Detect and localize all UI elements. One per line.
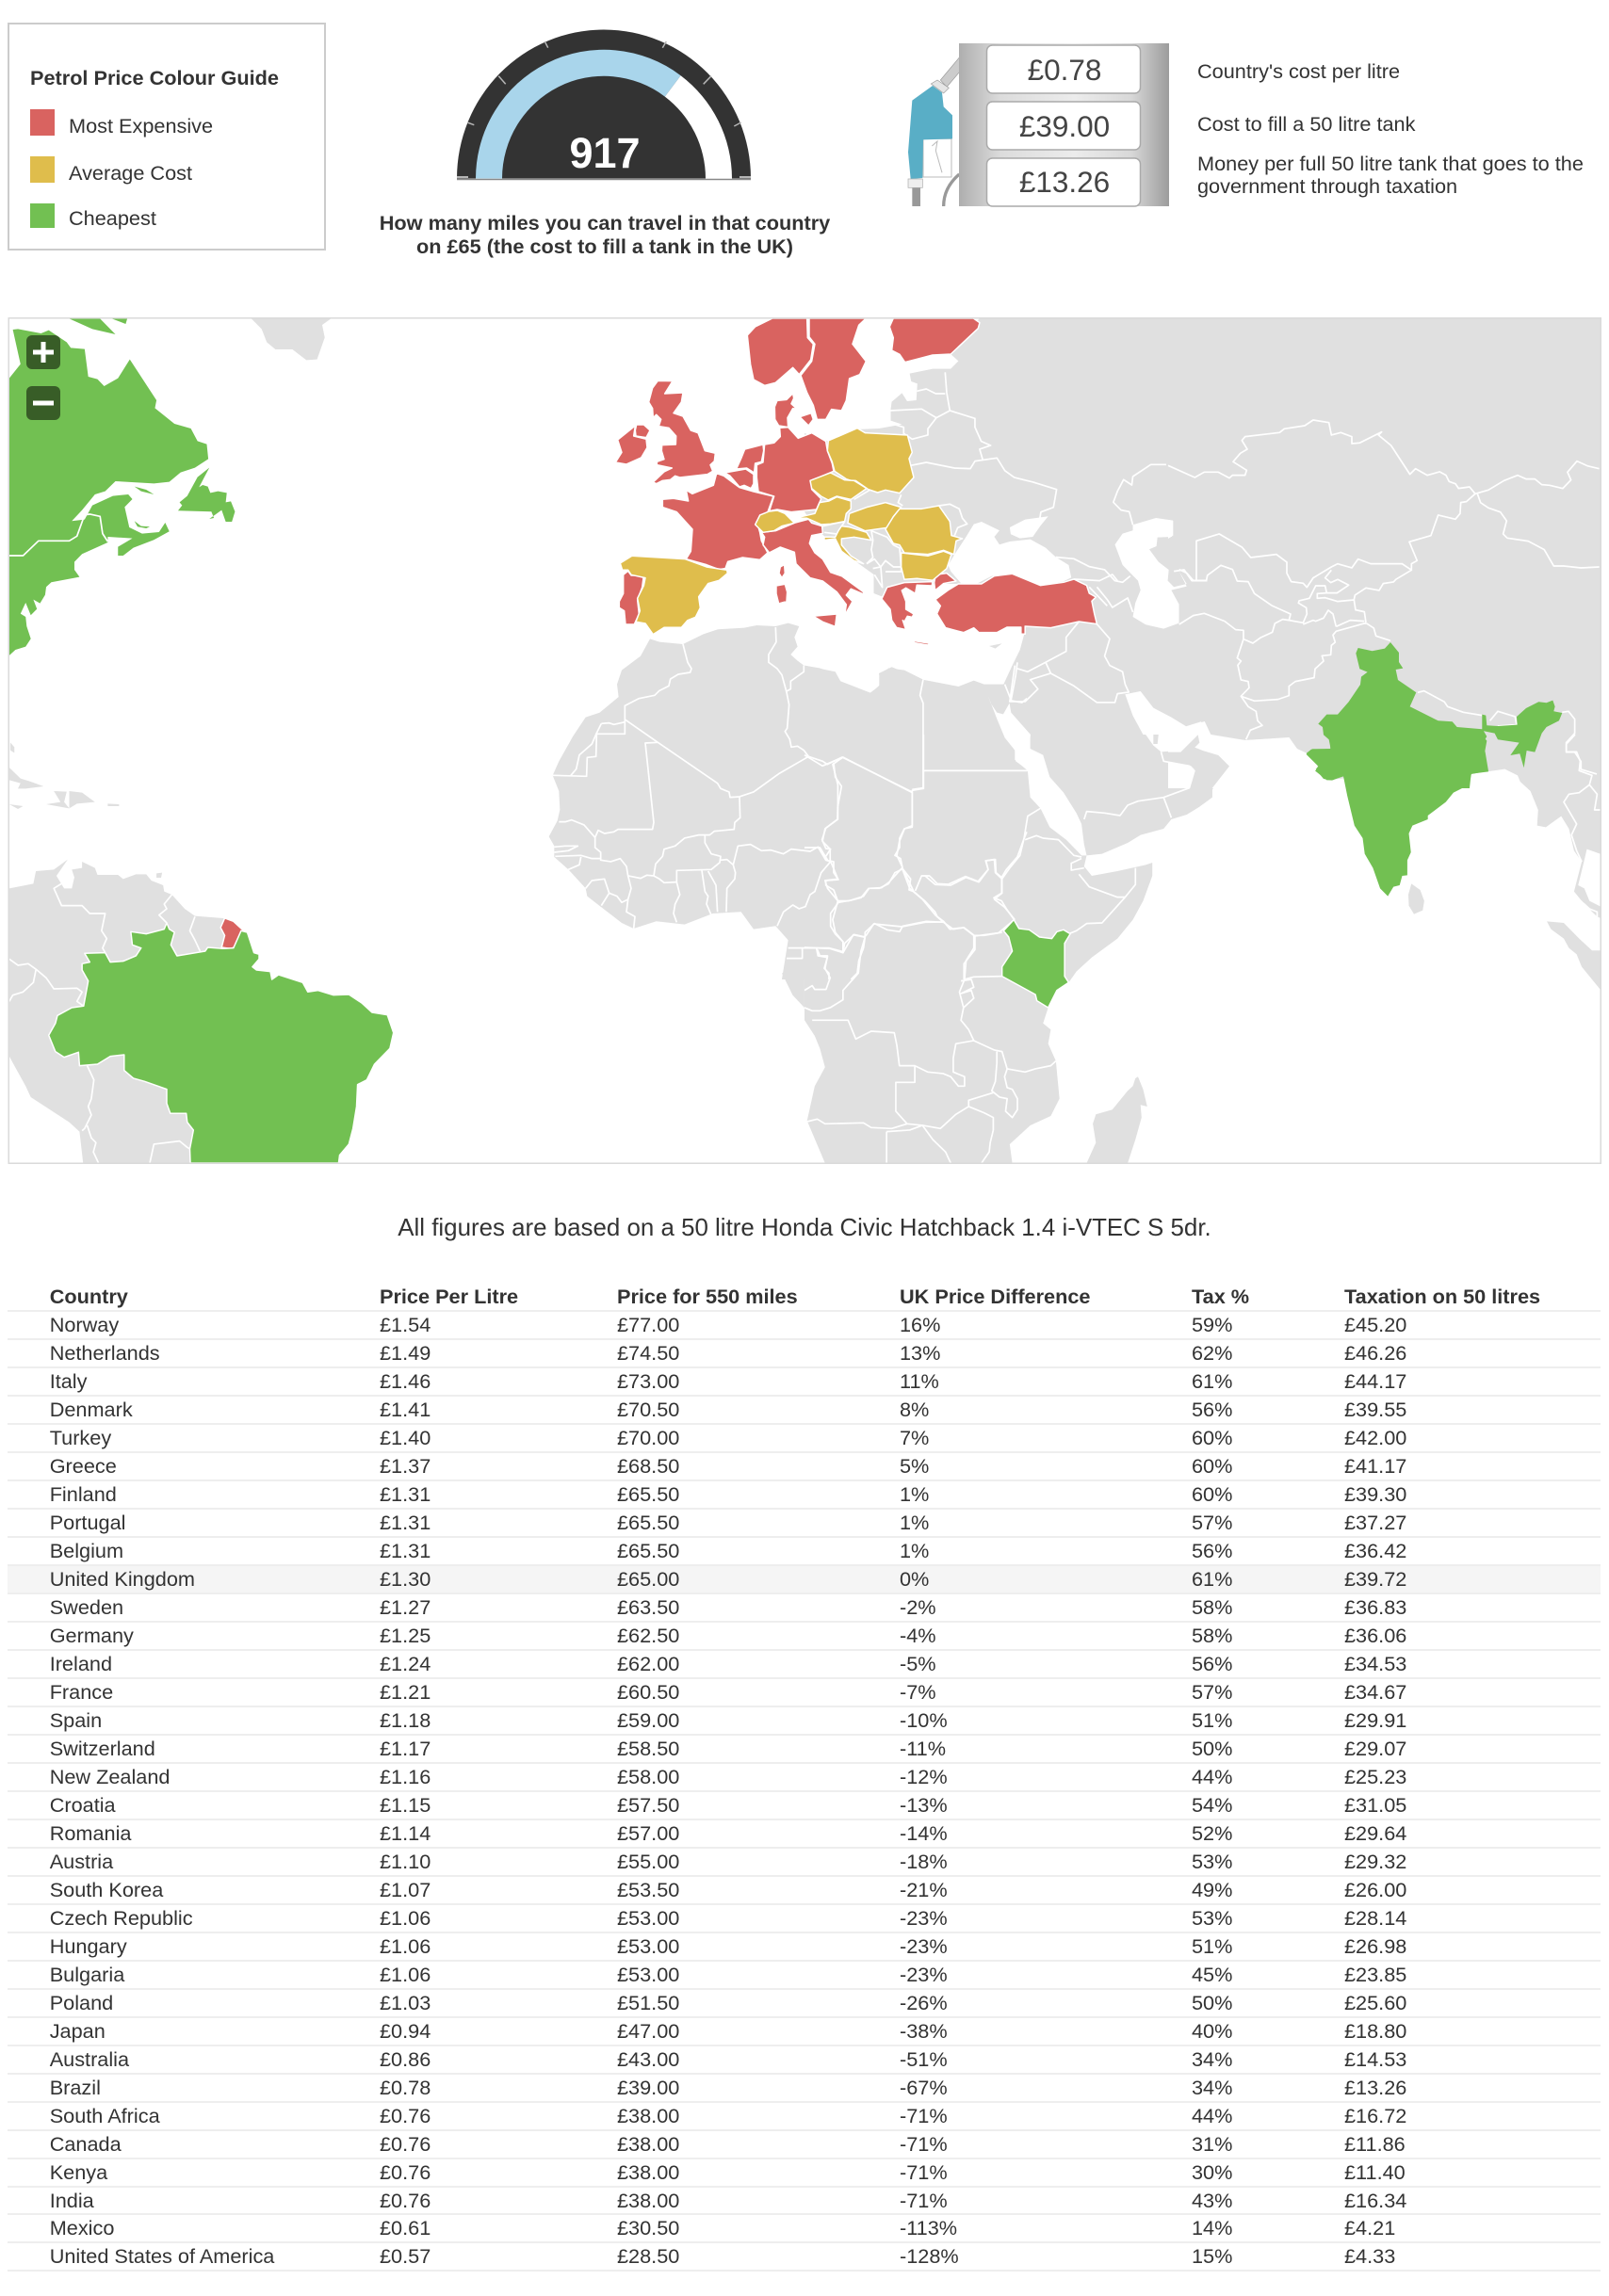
table: petrol prices by country: 34% (1192, 2047, 1232, 2071)
table: petrol prices by country: Kenya (50, 2160, 107, 2184)
table: petrol prices by country: Poland (50, 1991, 113, 2014)
country: Hungary (848, 503, 902, 531)
table header row: Taxation on 50 litres (1344, 1285, 1540, 1308)
table: petrol prices by country: -128% (900, 2244, 959, 2268)
table: petrol prices by country: £60.50 (617, 1680, 679, 1704)
table: petrol prices by country: -38% (900, 2019, 948, 2043)
land: islands and peninsulas over seas (989, 643, 1605, 1163)
table: petrol prices by country: South Africa (50, 2104, 160, 2127)
table: petrol prices by country: 13% (900, 1341, 940, 1365)
country: Spain (620, 556, 727, 635)
table: petrol prices by country: £37.27 (1344, 1511, 1406, 1534)
table: petrol prices by country: £11.86 (1344, 2132, 1406, 2156)
table: petrol prices by country: Brazil (50, 2076, 101, 2099)
table: petrol prices by country: -2% (900, 1595, 936, 1619)
table: petrol prices by country: £26.98 (1344, 1934, 1406, 1958)
table: petrol prices by country: £1.06 (380, 1963, 431, 1986)
table: petrol prices by country: £36.83 (1344, 1595, 1406, 1619)
table: petrol prices by country: United States of America (50, 2244, 274, 2268)
table: petrol prices by country: £1.03 (380, 1991, 431, 2014)
table: petrol prices by country: £0.76 (380, 2160, 431, 2184)
country: United Kingdom (635, 380, 715, 484)
country: Germany (756, 428, 834, 512)
land: base grey countries (9, 317, 1605, 1163)
zoom out button (26, 386, 60, 420)
country: Netherlands (738, 445, 763, 472)
table: petrol prices by country: France (50, 1680, 113, 1704)
country: Italy (761, 519, 864, 626)
table: petrol prices by country: Turkey (50, 1426, 111, 1449)
legend swatch: most expensive (30, 109, 55, 136)
country: Austria (787, 497, 851, 525)
table: petrol prices by country: Austria (50, 1850, 113, 1873)
table: petrol prices by country: -23% (900, 1963, 948, 1986)
table: petrol prices by country: 40% (1192, 2019, 1232, 2043)
table: petrol prices by country: £1.10 (380, 1850, 431, 1873)
table: petrol prices by country: £29.91 (1344, 1708, 1406, 1732)
table: petrol prices by country: £53.50 (617, 1878, 679, 1901)
table: petrol prices by country: £0.76 (380, 2104, 431, 2127)
table: petrol prices by country: 62% (1192, 1341, 1232, 1365)
table: petrol prices by country: £29.64 (1344, 1821, 1406, 1845)
table: petrol prices by country: Sweden (50, 1595, 123, 1619)
table header row (8, 1284, 1601, 1312)
table: petrol prices by country: Czech Republic (50, 1906, 193, 1930)
country borders: Africa (553, 627, 1601, 1163)
table: petrol prices by country: £1.21 (380, 1680, 431, 1704)
pump key: cost to fill a tank: Cost to fill a 50 litre tank (1197, 111, 1415, 136)
table: petrol prices by country: South Korea (50, 1878, 163, 1901)
table: petrol prices by country: £77.00 (617, 1313, 679, 1336)
table: petrol prices by country: £51.50 (617, 1991, 679, 2014)
table: petrol prices by country: £36.42 (1344, 1539, 1406, 1562)
table: petrol prices by country: -10% (900, 1708, 948, 1732)
table: petrol prices by country: £1.06 (380, 1906, 431, 1930)
legend label: most expensive: Most Expensive (69, 113, 213, 137)
country: Sweden (801, 318, 866, 419)
countries: average cost (yellow) (620, 428, 963, 635)
table: petrol prices by country: Croatia (50, 1793, 116, 1817)
country borders: South America (9, 882, 200, 1163)
table: petrol prices by country: -26% (900, 1991, 948, 2014)
zoom in button (26, 335, 60, 369)
icon: fuel pump with price displays: £13.26 (1019, 165, 1110, 199)
table header row: Tax % (1192, 1285, 1249, 1308)
table: petrol prices by country: £43.00 (617, 2047, 679, 2071)
table: petrol prices by country: Switzerland (50, 1737, 155, 1760)
country: Poland (827, 428, 914, 493)
table: petrol prices by country: 54% (1192, 1793, 1232, 1817)
table: petrol prices by country: £46.26 (1344, 1341, 1406, 1365)
country: Belgium (726, 469, 754, 488)
table: petrol prices by country: £41.17 (1344, 1454, 1406, 1478)
table: petrol prices by country: £44.17 (1344, 1369, 1406, 1393)
table: petrol prices by country: £53.00 (617, 1963, 679, 1986)
table: petrol prices by country: -11% (900, 1737, 946, 1760)
icon: fuel pump with price displays: £0.78 (1028, 53, 1101, 87)
table: petrol prices by country: £1.41 (380, 1398, 431, 1421)
table: petrol prices by country: 60% (1192, 1482, 1232, 1506)
table: petrol prices by country: 60% (1192, 1426, 1232, 1449)
highlighted row: United Kingdom: £65.00 (617, 1567, 679, 1591)
country: Switzerland (756, 510, 794, 532)
table: petrol prices by country: £1.37 (380, 1454, 431, 1478)
table: petrol prices by country: Italy (50, 1369, 87, 1393)
table header row: UK Price Difference (900, 1285, 1091, 1308)
table: petrol prices by country: £0.86 (380, 2047, 431, 2071)
table: petrol prices by country: £57.50 (617, 1793, 679, 1817)
table: petrol prices by country: £1.15 (380, 1793, 431, 1817)
table: petrol prices by country: £73.00 (617, 1369, 679, 1393)
table: petrol prices by country: £1.49 (380, 1341, 431, 1365)
table: petrol prices by country: 58% (1192, 1624, 1232, 1647)
table: petrol prices by country: £39.30 (1344, 1482, 1406, 1506)
country: Brazil (49, 923, 394, 1163)
country: Portugal (619, 571, 643, 624)
table: petrol prices by country: -71% (900, 2189, 948, 2211)
table: petrol prices by country: -4% (900, 1624, 936, 1647)
table: petrol prices by country: £57.00 (617, 1821, 679, 1845)
table: petrol prices by country: Denmark (50, 1398, 133, 1421)
table: petrol prices by country: Mexico (50, 2216, 114, 2239)
legend swatch: average cost (30, 156, 55, 183)
table: petrol prices by country: -23% (900, 1906, 948, 1930)
table: petrol prices by country: £65.50 (617, 1511, 679, 1534)
country: France (662, 474, 785, 578)
table: petrol prices by country: £1.25 (380, 1624, 431, 1647)
highlighted row: United Kingdom: United Kingdom (50, 1567, 195, 1591)
table: petrol prices by country: £62.50 (617, 1624, 679, 1647)
island: Crete (914, 642, 929, 644)
table: petrol prices by country: 56% (1192, 1398, 1232, 1421)
table: petrol prices by country: Finland (50, 1482, 117, 1506)
table: petrol prices by country: -21% (900, 1878, 948, 1901)
table: petrol prices by country: 30% (1192, 2160, 1232, 2184)
table: petrol prices by country: Spain (50, 1708, 102, 1732)
table: petrol prices by country: £65.50 (617, 1482, 679, 1506)
table: petrol prices by country: £4.33 (1344, 2244, 1395, 2268)
table: petrol prices by country: 34% (1192, 2076, 1232, 2099)
table: petrol prices by country: Ireland (50, 1652, 112, 1675)
table: petrol prices by country: Hungary (50, 1934, 127, 1958)
table: petrol prices by country: Netherlands (50, 1341, 160, 1365)
table: petrol prices by country: £39.55 (1344, 1398, 1406, 1421)
table: petrol prices by country: £34.67 (1344, 1680, 1406, 1704)
table: petrol prices by country: £45.20 (1344, 1313, 1406, 1336)
table: petrol prices by country: 1% (900, 1482, 929, 1506)
table: petrol prices by country: -7% (900, 1680, 936, 1704)
country: Turkey (Thrace) (935, 574, 956, 590)
table: petrol prices by country: £1.31 (380, 1511, 431, 1534)
table: petrol prices by country: 44% (1192, 2104, 1232, 2127)
legend label: average cost: Average Cost (69, 160, 192, 185)
table: petrol prices by country: £1.16 (380, 1765, 431, 1788)
table: petrol prices by country: £1.46 (380, 1369, 431, 1393)
country: Norway (747, 318, 813, 385)
table: petrol prices by country: -71% (900, 2132, 948, 2156)
table: petrol prices by country: £63.50 (617, 1595, 679, 1619)
table: petrol prices by country: £1.40 (380, 1426, 431, 1449)
table: petrol prices by country: 14% (1192, 2216, 1232, 2239)
pump key: tax per tank (1197, 151, 1584, 198)
table: petrol prices by country: £30.50 (617, 2216, 679, 2239)
table: petrol prices by country: 52% (1192, 1821, 1232, 1845)
territory: French Guiana (220, 918, 244, 948)
table: petrol prices by country: 56% (1192, 1652, 1232, 1675)
pump key: tax per tank: government through taxation (1197, 173, 1457, 198)
table: petrol prices by country: £39.00 (617, 2076, 679, 2099)
table: petrol prices by country: £1.31 (380, 1482, 431, 1506)
gauge: miles travelled on £65 (457, 30, 751, 181)
table: petrol prices by country: 50% (1192, 1737, 1232, 1760)
seas and lakes (804, 516, 1605, 1163)
country: Denmark (774, 394, 813, 428)
table: petrol prices by country: £59.00 (617, 1708, 679, 1732)
table: petrol prices by country: 53% (1192, 1906, 1232, 1930)
country: India (1307, 642, 1562, 897)
table: petrol prices by country: Portugal (50, 1511, 125, 1534)
table: petrol prices by country: -13% (900, 1793, 948, 1817)
table header row: Price Per Litre (380, 1285, 518, 1308)
country: Croatia (824, 526, 871, 564)
countries: cheapest (green) (9, 318, 1562, 1163)
table: petrol prices by country: £55.00 (617, 1850, 679, 1873)
country: Bulgaria (902, 551, 951, 580)
table: petrol prices by country: £34.53 (1344, 1652, 1406, 1675)
gauge caption (380, 211, 830, 258)
legend swatch: cheapest (30, 203, 55, 228)
table: petrol prices by country: Greece (50, 1454, 117, 1478)
country: Romania (886, 506, 963, 555)
table: petrol prices by country: 57% (1192, 1680, 1232, 1704)
gauge caption: on £65 (the cost to fill a tank in the UK) (416, 234, 793, 258)
table: petrol prices by country: Germany (50, 1624, 134, 1647)
table: petrol prices by country: £53.00 (617, 1906, 679, 1930)
table: petrol prices by country: £25.23 (1344, 1765, 1406, 1788)
table header row: Country (50, 1285, 128, 1308)
table: petrol prices by country: £25.60 (1344, 1991, 1406, 2014)
legend label: cheapest: Cheapest (69, 205, 156, 230)
table: petrol prices by country: £31.05 (1344, 1793, 1406, 1817)
table: petrol prices by country: £0.76 (380, 2132, 431, 2156)
table: petrol prices by country: 51% (1192, 1708, 1232, 1732)
table: petrol prices by country: £26.00 (1344, 1878, 1406, 1901)
pump key: tax per tank: Money per full 50 litre tank that goes to the (1197, 151, 1584, 175)
table: petrol prices by country: 5% (900, 1454, 929, 1478)
table: petrol prices by country: New Zealand (50, 1765, 170, 1788)
gauge: miles travelled on £65: 917 (569, 129, 641, 177)
table: petrol prices by country: 1% (900, 1511, 929, 1534)
table: petrol prices by country: 7% (900, 1426, 929, 1449)
table: petrol prices by country: £1.17 (380, 1737, 431, 1760)
highlighted row: United Kingdom: £39.72 (1344, 1567, 1406, 1591)
country: Czech Republic (810, 473, 867, 500)
table: petrol prices by country: £68.50 (617, 1454, 679, 1478)
table: petrol prices by country: -71% (900, 2104, 948, 2127)
table: petrol prices by country: 31% (1192, 2132, 1232, 2156)
icon: fuel pump with price displays: £39.00 (1019, 109, 1110, 143)
table: petrol prices by country: 59% (1192, 1313, 1232, 1336)
table: petrol prices by country: £1.31 (380, 1539, 431, 1562)
map frame (8, 318, 1601, 1164)
table: petrol prices by country: 49% (1192, 1878, 1232, 1901)
table: petrol prices by country: £38.00 (617, 2132, 679, 2156)
legend heading: Petrol Price Colour Guide (30, 66, 279, 89)
country borders: Europe, Middle East and Asia (753, 372, 1600, 788)
table: petrol prices by country: £16.72 (1344, 2104, 1406, 2127)
table: petrol prices by country: -14% (900, 1821, 948, 1845)
table: petrol prices by country: £0.94 (380, 2019, 431, 2043)
table: petrol prices by country: -18% (900, 1850, 948, 1873)
table: petrol prices by country: £62.00 (617, 1652, 679, 1675)
country: Finland (889, 318, 980, 363)
table: petrol prices by country: £38.00 (617, 2189, 679, 2211)
table: petrol prices by country: £70.00 (617, 1426, 679, 1449)
table: petrol prices by country: £16.34 (1344, 2189, 1406, 2211)
table: petrol prices by country: Australia (50, 2047, 129, 2071)
panel: petrol price colour guide legend (8, 23, 326, 251)
table: petrol prices by country: £1.18 (380, 1708, 431, 1732)
table: petrol prices by country: £4.21 (1344, 2216, 1395, 2239)
table: petrol prices by country: 16% (900, 1313, 940, 1336)
table: petrol prices by country: £18.80 (1344, 2019, 1406, 2043)
table: petrol prices by country: Belgium (50, 1539, 123, 1562)
highlighted row: United Kingdom (8, 1566, 1601, 1594)
table: petrol prices by country: £28.14 (1344, 1906, 1406, 1930)
gauge caption: How many miles you can travel in that country (380, 211, 830, 234)
table: petrol prices by country: Canada (50, 2132, 122, 2156)
table: petrol prices by country: -51% (900, 2047, 948, 2071)
highlighted row: United Kingdom: £1.30 (380, 1567, 431, 1591)
table: petrol prices by country: £13.26 (1344, 2076, 1406, 2099)
table: petrol prices by country: £38.00 (617, 2160, 679, 2184)
country: Ireland (615, 426, 647, 464)
table: petrol prices by country: £42.00 (1344, 1426, 1406, 1449)
table: petrol prices by country: 58% (1192, 1595, 1232, 1619)
country: Greece (882, 582, 933, 630)
table: petrol prices by country: £58.00 (617, 1765, 679, 1788)
icon: fuel pump with price displays (908, 43, 1169, 207)
table: petrol prices by country: £38.00 (617, 2104, 679, 2127)
table: petrol prices by country: 60% (1192, 1454, 1232, 1478)
table: petrol prices by country: 8% (900, 1398, 929, 1421)
table: petrol prices by country: £1.06 (380, 1934, 431, 1958)
table: petrol prices by country: 57% (1192, 1511, 1232, 1534)
table: petrol prices by country: 43% (1192, 2189, 1232, 2211)
table: petrol prices by country: £36.06 (1344, 1624, 1406, 1647)
table: petrol prices by country: -5% (900, 1652, 936, 1675)
table: petrol prices by country: -71% (900, 2160, 948, 2184)
table: petrol prices by country: 53% (1192, 1850, 1232, 1873)
country: Turkey (935, 574, 1097, 634)
country: Kenya (1002, 920, 1070, 1008)
table: petrol prices by country: £28.50 (617, 2244, 679, 2268)
table header row: Price for 550 miles (617, 1285, 798, 1308)
table: petrol prices by country: 44% (1192, 1765, 1232, 1788)
table: petrol prices by country: £1.54 (380, 1313, 431, 1336)
table: petrol prices by country: India (50, 2189, 94, 2211)
highlighted row: United Kingdom: 0% (900, 1567, 929, 1591)
table: petrol prices by country: 50% (1192, 1991, 1232, 2014)
table: petrol prices by country: 61% (1192, 1369, 1232, 1393)
table: petrol prices by country: 15% (1192, 2244, 1232, 2268)
table: petrol prices by country: £23.85 (1344, 1963, 1406, 1986)
table: petrol prices by country: £0.78 (380, 2076, 431, 2099)
table: petrol prices by country: £70.50 (617, 1398, 679, 1421)
table: petrol prices by country: £0.57 (380, 2244, 431, 2268)
table: petrol prices by country: £1.24 (380, 1652, 431, 1675)
table: petrol prices by country: £0.61 (380, 2216, 431, 2239)
table: petrol prices by country: Bulgaria (50, 1963, 124, 1986)
panel: world map (8, 317, 1601, 1164)
note: basis of figures: All figures are based on a 50 litre Honda Civic Hatchback 1.4 i-VTEC S 5dr. (398, 1215, 1211, 1241)
table: petrol prices by country: 45% (1192, 1963, 1232, 1986)
table: petrol prices by country: £29.07 (1344, 1737, 1406, 1760)
table: petrol prices by country (8, 1285, 1601, 2272)
table: petrol prices by country: 11% (900, 1369, 939, 1393)
table: petrol prices by country: -12% (900, 1765, 948, 1788)
table: petrol prices by country: £74.50 (617, 1341, 679, 1365)
highlighted row: United Kingdom: 61% (1192, 1567, 1232, 1591)
table: petrol prices by country: Japan (50, 2019, 106, 2043)
table: petrol prices by country: 1% (900, 1539, 929, 1562)
table: petrol prices by country: £1.07 (380, 1878, 431, 1901)
country: Canada and United States (9, 318, 235, 655)
table: petrol prices by country: 51% (1192, 1934, 1232, 1958)
table: petrol prices by country: Romania (50, 1821, 131, 1845)
table: petrol prices by country: £11.40 (1344, 2160, 1406, 2184)
countries: most expensive (red) (220, 318, 1097, 948)
table: petrol prices by country: £1.27 (380, 1595, 431, 1619)
table: petrol prices by country: £58.50 (617, 1737, 679, 1760)
table: petrol prices by country: £53.00 (617, 1934, 679, 1958)
table: petrol prices by country: -67% (900, 2076, 948, 2099)
table: petrol prices by country: -23% (900, 1934, 948, 1958)
table: petrol prices by country: £14.53 (1344, 2047, 1406, 2071)
table: petrol prices by country: £0.76 (380, 2189, 431, 2211)
table: petrol prices by country: £47.00 (617, 2019, 679, 2043)
table: petrol prices by country: £65.50 (617, 1539, 679, 1562)
table: petrol prices by country: £29.32 (1344, 1850, 1406, 1873)
pump key: country's cost per litre: Country's cost per litre (1197, 58, 1400, 83)
table: petrol prices by country: Norway (50, 1313, 119, 1336)
table: petrol prices by country: -113% (900, 2216, 957, 2239)
table: petrol prices by country: £1.14 (380, 1821, 431, 1845)
table: petrol prices by country: 56% (1192, 1539, 1232, 1562)
